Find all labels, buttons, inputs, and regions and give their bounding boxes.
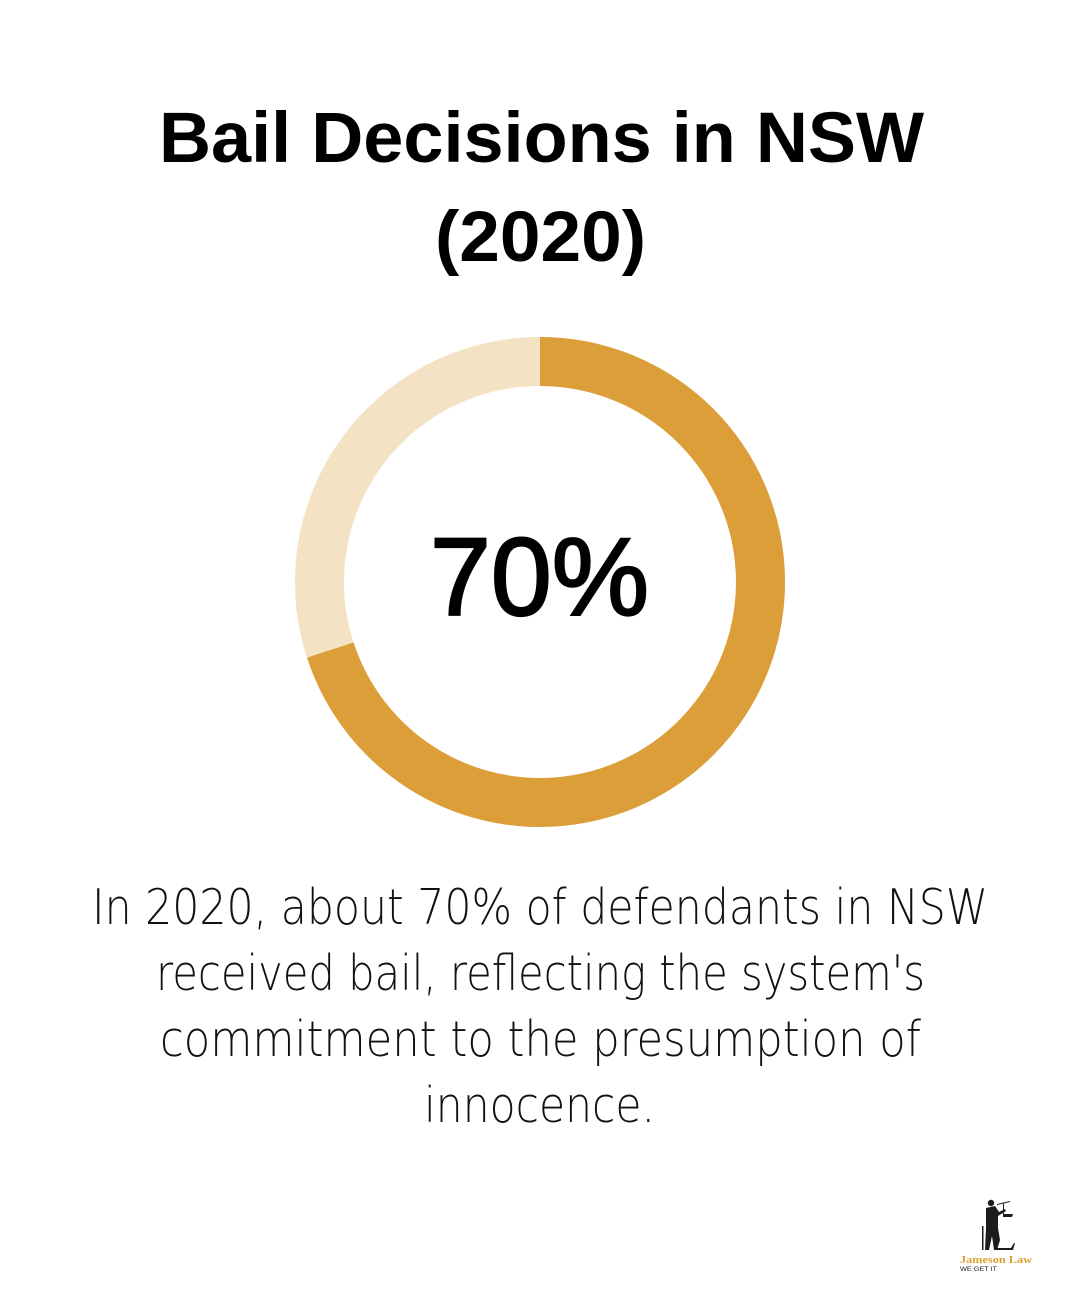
description text: innocence. (424, 1077, 655, 1134)
title: (2020) (435, 198, 646, 277)
description text: received bail, reflecting the system's (156, 945, 925, 1002)
title (159, 99, 924, 277)
description text: commitment to the presumption of (160, 1011, 922, 1068)
donut track (320, 362, 760, 802)
logo: Jameson Law (960, 1200, 1032, 1273)
logo name: Jameson Law (960, 1255, 1032, 1266)
donut centre value: 70% (430, 516, 649, 639)
logo tagline: WE GET IT (960, 1266, 997, 1273)
donut chart: 70% (320, 362, 761, 802)
icon: lady justice (982, 1200, 1015, 1250)
description text (92, 879, 988, 1134)
donut value arc (330, 362, 761, 802)
title: Bail Decisions in NSW (159, 99, 924, 178)
